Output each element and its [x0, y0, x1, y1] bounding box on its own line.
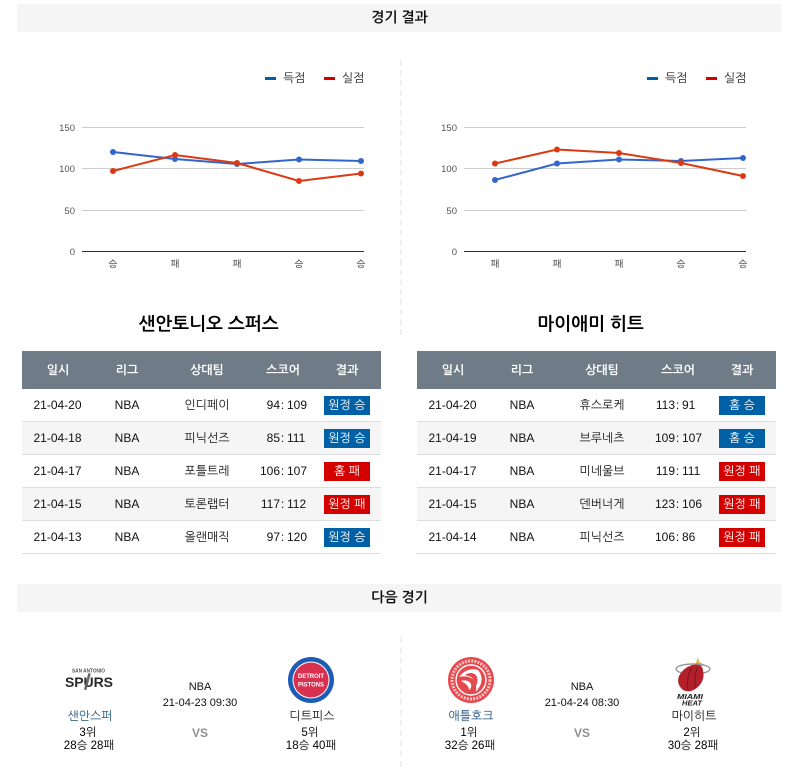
table: San Antonio Spurs recent games: :	[281, 530, 284, 544]
team block: Heat: 30승 28패	[668, 740, 718, 752]
table: Miami Heat recent games: 피닉선즈	[579, 530, 625, 544]
x axis labels: 승	[109, 259, 118, 270]
line chart: San Antonio Spurs	[59, 71, 366, 270]
table: San Antonio Spurs recent games: 결과	[336, 363, 358, 377]
y axis labels: 50	[64, 206, 75, 217]
icon: Pistons logo: DETROIT	[298, 674, 324, 680]
table: Miami Heat recent games: 상대팀	[585, 363, 619, 377]
team block: Heat: 2위	[683, 727, 701, 739]
table: San Antonio Spurs recent games: 원정 승	[328, 530, 366, 544]
table: San Antonio Spurs recent games: 토론랩터	[184, 497, 230, 511]
team block: Spurs: 3위	[79, 727, 97, 739]
table: San Antonio Spurs recent games: 일시	[47, 363, 69, 377]
table: Miami Heat recent games	[417, 351, 776, 554]
table: Miami Heat recent games: NBA	[510, 464, 534, 478]
team block: Spurs	[64, 709, 114, 752]
match info: Hawks vs Heat	[545, 681, 619, 709]
table: Miami Heat recent games: 113	[656, 398, 675, 412]
icon: Spurs logo: SAN ANTONIO	[72, 668, 105, 674]
table: San Antonio Spurs recent games: 상대팀	[190, 363, 224, 377]
y axis labels: 150	[59, 123, 75, 134]
team block: Spurs: 샌안스퍼	[67, 709, 113, 723]
table: Miami Heat recent games: 홈 승	[729, 431, 755, 445]
match info: Spurs vs Pistons: 21-04-23 09:30	[163, 697, 237, 709]
heading: match results	[17, 4, 781, 32]
table: Miami Heat recent games: NBA	[510, 530, 534, 544]
y axis labels: 50	[446, 206, 457, 217]
heading: next game	[17, 584, 781, 612]
table: San Antonio Spurs recent games: 21-04-13	[33, 530, 82, 544]
team title: San Antonio Spurs: 샌안토니오 스퍼스	[138, 314, 279, 334]
y axis labels: 150	[441, 123, 457, 134]
table: Miami Heat recent games: 91	[682, 398, 695, 412]
y axis labels	[59, 123, 75, 258]
team block: Pistons: 디트피스	[289, 709, 335, 723]
team block: Hawks	[445, 709, 495, 752]
table: Miami Heat recent games: NBA	[510, 431, 534, 445]
table: San Antonio Spurs recent games: 21-04-20	[33, 398, 82, 412]
table: San Antonio Spurs recent games: NBA	[115, 431, 139, 445]
icon: Hawks logo	[448, 657, 494, 703]
table: Miami Heat recent games: 119	[656, 464, 675, 478]
x axis labels: 승	[357, 259, 366, 270]
table: San Antonio Spurs recent games: 인디페이	[184, 398, 230, 412]
table: Miami Heat recent games: 21-04-17	[428, 464, 477, 478]
table: Miami Heat recent games: 결과	[731, 363, 753, 377]
table: San Antonio Spurs recent games: 21-04-18	[33, 431, 82, 445]
table: Miami Heat recent games: :	[676, 431, 679, 445]
table: Miami Heat recent games: 106	[655, 530, 675, 544]
table: Miami Heat recent games: 브루네츠	[579, 431, 625, 445]
x axis labels: 승	[295, 259, 304, 270]
x axis labels: 패	[233, 259, 241, 270]
x axis labels: 패	[171, 259, 179, 270]
team block: Hawks: 애틀호크	[448, 709, 494, 723]
x axis labels	[491, 259, 748, 270]
table: San Antonio Spurs recent games: 21-04-15	[33, 497, 82, 511]
table: Miami Heat recent games: 109	[655, 431, 675, 445]
table: Miami Heat recent games: 원정 패	[723, 464, 761, 478]
x axis labels: 패	[615, 259, 623, 270]
table: Miami Heat recent games: :	[676, 398, 679, 412]
table: San Antonio Spurs recent games: :	[281, 464, 284, 478]
table: San Antonio Spurs recent games: 리그	[116, 363, 138, 377]
table: San Antonio Spurs recent games: 올랜매직	[184, 530, 230, 544]
chart legend: 득점	[283, 71, 306, 85]
chart legend: 실점	[342, 71, 365, 85]
chart legend	[265, 71, 365, 85]
table: Miami Heat recent games: 111	[682, 464, 700, 478]
heading: match results: 경기 결과	[371, 9, 428, 25]
table: San Antonio Spurs recent games: 94	[267, 398, 280, 412]
icon: Heat logo	[675, 657, 711, 706]
table: San Antonio Spurs recent games: 117	[261, 497, 280, 511]
series: points allowed	[110, 152, 364, 184]
table: Miami Heat recent games: 21-04-15	[428, 497, 477, 511]
x axis labels: 승	[677, 259, 686, 270]
table: Miami Heat recent games: 휴스로케	[579, 398, 625, 412]
table: San Antonio Spurs recent games: 112	[287, 497, 306, 511]
x axis labels: 패	[491, 259, 499, 270]
table: San Antonio Spurs recent games: :	[281, 398, 284, 412]
table: Miami Heat recent games: 스코어	[661, 363, 695, 377]
table: San Antonio Spurs recent games: :	[281, 431, 284, 445]
table: Miami Heat recent games: :	[676, 530, 679, 544]
team block: Pistons: 18승 40패	[286, 740, 336, 752]
table: San Antonio Spurs recent games: NBA	[115, 497, 139, 511]
label: VS: VS	[574, 726, 590, 740]
table: San Antonio Spurs recent games	[22, 351, 381, 554]
label: VS: VS	[192, 726, 208, 740]
y axis labels: 0	[70, 247, 75, 258]
series: points allowed	[492, 146, 746, 179]
table: San Antonio Spurs recent games: 원정 패	[328, 497, 366, 511]
x axis labels	[109, 259, 366, 270]
table: San Antonio Spurs recent games: 피닉선즈	[184, 431, 230, 445]
table: San Antonio Spurs recent games: 106	[260, 464, 280, 478]
table: San Antonio Spurs recent games: 85	[267, 431, 280, 445]
table: San Antonio Spurs recent games: NBA	[115, 398, 139, 412]
team block: Heat	[668, 709, 718, 752]
table: Miami Heat recent games: 일시	[442, 363, 464, 377]
icon: Spurs logo: SPURS	[65, 674, 113, 690]
table: San Antonio Spurs recent games: NBA	[115, 464, 139, 478]
team title: Miami Heat: 마이애미 히트	[537, 314, 644, 334]
table: San Antonio Spurs recent games: 97	[267, 530, 280, 544]
table: Miami Heat recent games: 홈 승	[729, 398, 755, 412]
table: Miami Heat recent games: 123	[655, 497, 675, 511]
table: Miami Heat recent games: 덴버너게	[579, 497, 625, 511]
line chart: Miami Heat	[441, 71, 748, 270]
icon: Pistons logo: PISTONS	[298, 682, 324, 688]
table: Miami Heat recent games: 원정 패	[723, 530, 761, 544]
table: Miami Heat recent games: 107	[682, 431, 702, 445]
team block: Pistons: 5위	[301, 727, 319, 739]
heading: next game: 다음 경기	[371, 589, 428, 605]
table: Miami Heat recent games: 미네울브	[579, 464, 625, 478]
icon: Pistons logo	[288, 657, 334, 703]
table: San Antonio Spurs recent games: 120	[287, 530, 307, 544]
chart legend: 실점	[724, 71, 747, 85]
team block: Heat: 마이히트	[671, 709, 717, 723]
x axis labels: 패	[553, 259, 561, 270]
table: Miami Heat recent games: NBA	[510, 497, 534, 511]
match info: Spurs vs Pistons: NBA	[189, 681, 211, 693]
table: San Antonio Spurs recent games: 원정 승	[328, 398, 366, 412]
table: San Antonio Spurs recent games: NBA	[115, 530, 139, 544]
icon: Heat logo: MIAMI	[677, 694, 704, 701]
match info: Hawks vs Heat: 21-04-24 08:30	[545, 697, 619, 709]
table: San Antonio Spurs recent games: 111	[287, 431, 305, 445]
table: Miami Heat recent games: 원정 패	[723, 497, 761, 511]
table: San Antonio Spurs recent games: :	[281, 497, 284, 511]
table: San Antonio Spurs recent games: 107	[287, 464, 307, 478]
table: Miami Heat recent games: 106	[682, 497, 702, 511]
series: points scored	[492, 155, 746, 183]
table: San Antonio Spurs recent games: 스코어	[266, 363, 300, 377]
table: San Antonio Spurs recent games: 109	[287, 398, 307, 412]
match info: Hawks vs Heat: NBA	[571, 681, 593, 693]
y axis labels: 100	[59, 164, 75, 175]
team block: Pistons	[286, 709, 336, 752]
team block: Hawks: 32승 26패	[445, 740, 495, 752]
y axis labels: 100	[441, 164, 457, 175]
table: San Antonio Spurs recent games: 포틀트레	[184, 464, 230, 478]
table: Miami Heat recent games: 리그	[511, 363, 533, 377]
y axis labels	[441, 123, 457, 258]
table: San Antonio Spurs recent games: 21-04-17	[33, 464, 82, 478]
team block: Hawks: 1위	[460, 727, 478, 739]
table: Miami Heat recent games: NBA	[510, 398, 534, 412]
table: San Antonio Spurs recent games: 홈 패	[334, 464, 360, 478]
table: San Antonio Spurs recent games: 원정 승	[328, 431, 366, 445]
table: Miami Heat recent games: 21-04-20	[428, 398, 477, 412]
x axis labels: 승	[739, 259, 748, 270]
table: Miami Heat recent games: 21-04-14	[428, 530, 477, 544]
table: Miami Heat recent games: :	[676, 497, 679, 511]
chart legend: 득점	[665, 71, 688, 85]
team block: Spurs: 28승 28패	[64, 740, 114, 752]
chart legend	[647, 71, 747, 85]
table: Miami Heat recent games: 21-04-19	[428, 431, 477, 445]
table: Miami Heat recent games: :	[676, 464, 679, 478]
series: points scored	[110, 149, 364, 167]
table: Miami Heat recent games: 86	[682, 530, 695, 544]
y axis labels: 0	[452, 247, 457, 258]
match info: Spurs vs Pistons	[163, 681, 237, 709]
